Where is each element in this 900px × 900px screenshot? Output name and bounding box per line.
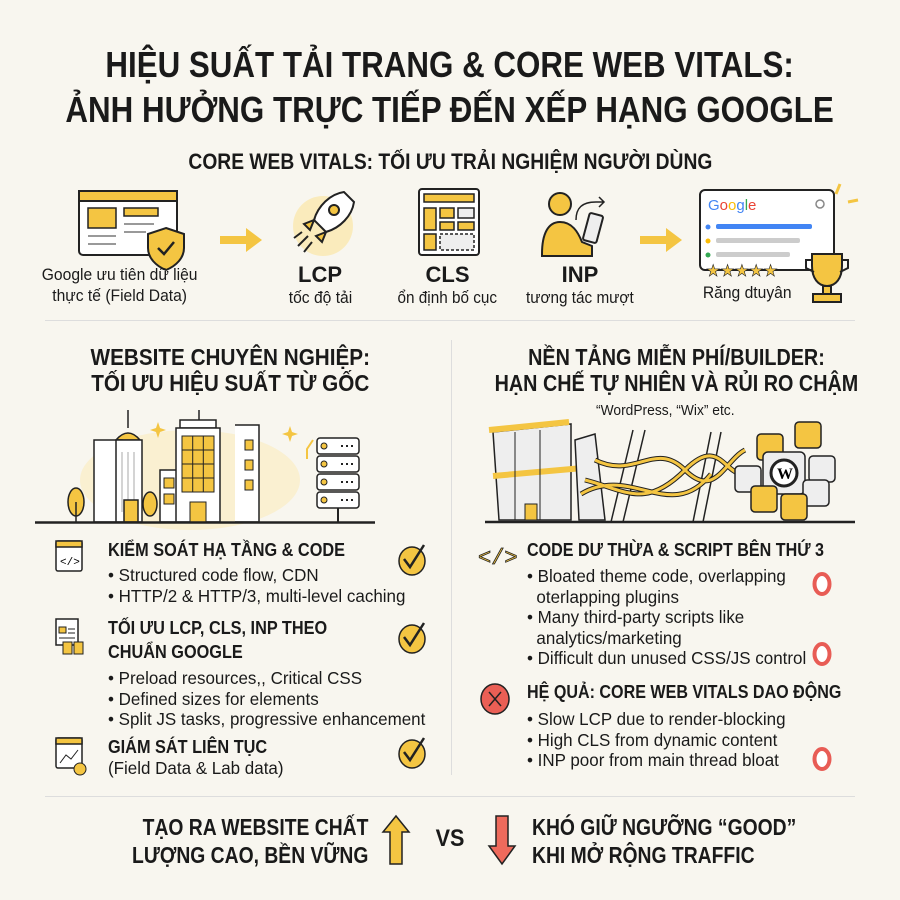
heading: professional website: TỐI ƯU HIỆU SUẤT TỪ GỐC bbox=[91, 370, 369, 396]
item: consequence: • High CLS from dynamic content bbox=[527, 730, 777, 750]
text: field data: Google ưu tiên dữ liệu bbox=[42, 265, 198, 284]
item: monitoring: GIÁM SÁT LIÊN TỤC bbox=[108, 736, 267, 757]
conclusion right bbox=[532, 814, 796, 868]
icon: rocket bbox=[293, 191, 356, 256]
arrow 1 bbox=[220, 228, 262, 252]
item: optimize vitals: • Split JS tasks, progressive enhancement bbox=[108, 709, 425, 729]
item: consequence bbox=[480, 681, 841, 771]
conclusion left bbox=[132, 814, 368, 868]
heading: free platform: NỀN TẢNG MIỄN PHÍ/BUILDER: bbox=[528, 344, 825, 370]
subtext: wordpress wix: “WordPress, “Wix” etc. bbox=[596, 402, 734, 419]
heading: free platform: HẠN CHẾ TỰ NHIÊN VÀ RỦI RO CHẬM bbox=[495, 370, 858, 396]
label: INP: tương tác mượt bbox=[526, 288, 634, 307]
icon: google search trophy: ★★★★★ bbox=[706, 261, 778, 280]
icon: google search trophy bbox=[699, 184, 858, 303]
list: professional bbox=[55, 539, 426, 778]
item: optimize vitals bbox=[55, 617, 426, 729]
item: bloated code bbox=[478, 539, 832, 668]
item: bloated code: CODE DƯ THỪA & SCRIPT BÊN THỨ 3 bbox=[527, 539, 824, 560]
label: INP: INP bbox=[562, 262, 598, 287]
icon: down arrow bbox=[488, 815, 516, 866]
label: CLS: ổn định bố cục bbox=[398, 288, 497, 307]
item: bloated code: • Difficult dun unused CSS/JS control bbox=[527, 648, 806, 668]
title: HIỆU SUẤT TẢI TRANG & CORE WEB VITALS: bbox=[106, 44, 794, 85]
title bbox=[66, 44, 834, 130]
heading: free platform bbox=[495, 344, 858, 396]
icon: up arrow bbox=[382, 814, 410, 865]
item: optimize vitals: CHUẨN GOOGLE bbox=[108, 641, 243, 662]
icon: browser shield bbox=[78, 190, 185, 271]
item: optimize vitals: • Preload resources,, Critical CSS bbox=[108, 668, 362, 688]
conclusion right: KHI MỞ RỘNG TRAFFIC bbox=[532, 842, 755, 868]
list: free platform bbox=[478, 539, 841, 771]
item: bloated code: • Many third-party scripts like bbox=[527, 607, 744, 627]
item: infra control bbox=[55, 539, 426, 606]
arrow 2 bbox=[640, 228, 682, 252]
item: infra control: </> bbox=[60, 557, 80, 569]
vs: VS bbox=[436, 825, 464, 852]
label: LCP: tốc độ tải bbox=[288, 288, 352, 307]
conclusion left: TẠO RA WEBSITE CHẤT bbox=[142, 814, 368, 840]
item: bloated code: </> bbox=[478, 546, 518, 571]
item: bloated code: oterlapping plugins bbox=[536, 586, 679, 606]
divider bbox=[45, 320, 855, 321]
text: field data bbox=[42, 265, 198, 304]
illustration: city and server bbox=[67, 410, 300, 530]
label: LCP: LCP bbox=[298, 262, 342, 287]
conclusion left: LƯỢNG CAO, BỀN VỮNG bbox=[132, 842, 368, 868]
title: ẢNH HƯỞNG TRỰC TIẾP ĐẾN XẾP HẠNG GOOGLE bbox=[66, 89, 834, 130]
item: consequence: • INP poor from main thread bloat bbox=[527, 750, 779, 770]
text: field data: thực tế (Field Data) bbox=[53, 286, 187, 304]
label: CLS: CLS bbox=[426, 262, 470, 287]
item: monitoring: (Field Data & Lab data) bbox=[108, 758, 284, 778]
icon: google search trophy: Google bbox=[708, 197, 756, 214]
label: INP bbox=[526, 262, 634, 307]
heading: professional website bbox=[90, 344, 370, 396]
item: optimize vitals: • Defined sizes for elements bbox=[108, 688, 319, 708]
icon: layout grid bbox=[418, 188, 480, 256]
item: infra control: • Structured code flow, CDN bbox=[108, 565, 319, 585]
item: bloated code: analytics/marketing bbox=[536, 628, 682, 648]
illustration: broken building and plugins bbox=[485, 419, 855, 524]
item: optimize vitals: TỐI ƯU LCP, CLS, INP THEO bbox=[108, 617, 327, 638]
item: infra control: KIỂM SOÁT HẠ TẦNG & CODE bbox=[108, 539, 345, 560]
item: monitoring bbox=[55, 736, 426, 778]
subtitle: CORE WEB VITALS: TỐI ƯU TRẢI NGHIỆM NGƯỜI DÙNG bbox=[188, 149, 712, 174]
item: consequence: HỆ QUẢ: CORE WEB VITALS DAO ĐỘNG bbox=[527, 681, 841, 702]
label: CLS bbox=[398, 262, 497, 307]
item: infra control: • HTTP/2 & HTTP/3, multi-level caching bbox=[108, 586, 405, 606]
label: ranking: Răng dtuyân bbox=[703, 283, 792, 302]
divider bottom bbox=[45, 796, 855, 797]
label: LCP bbox=[288, 262, 352, 307]
item: bloated code: • Bloated theme code, overlapping bbox=[527, 566, 786, 586]
illustration: broken building and plugins: W bbox=[777, 466, 793, 483]
item: consequence: • Slow LCP due to render-blocking bbox=[527, 709, 786, 729]
conclusion right: KHÓ GIỮ NGƯỠNG “GOOD” bbox=[532, 814, 796, 840]
heading: professional website: WEBSITE CHUYÊN NGHIỆP: bbox=[90, 344, 370, 370]
icon: person tablet bbox=[541, 192, 605, 257]
